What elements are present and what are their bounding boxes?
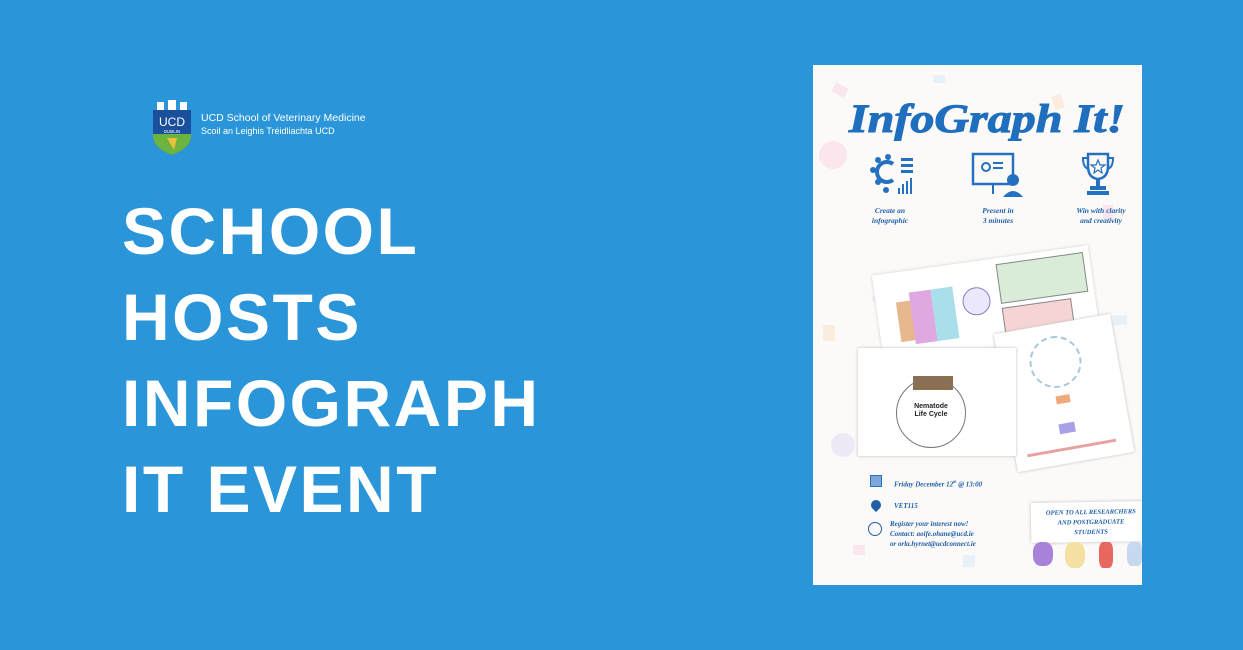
logo bbox=[153, 100, 366, 155]
icon: trophy bbox=[1082, 152, 1114, 195]
caption: win bbox=[1076, 206, 1126, 225]
callout: open to all: STUDENTS bbox=[1074, 529, 1108, 536]
caption: create: Create an bbox=[875, 206, 905, 215]
poster bbox=[813, 65, 1142, 585]
register: or orla.hyrnet@ucdconnect.ie bbox=[890, 540, 976, 548]
headline: HOSTS bbox=[122, 280, 362, 354]
characters bbox=[1033, 542, 1142, 568]
sample: nematode life cycle card bbox=[858, 348, 1016, 456]
icon: calendar bbox=[870, 475, 882, 487]
logo text: Scoil an Leighis Tréidliachta UCD bbox=[201, 126, 335, 136]
register: Contact: aoife.ohane@ucd.ie bbox=[890, 530, 974, 538]
icon: UCD crest: UCD bbox=[159, 115, 185, 129]
sample: right diagram card bbox=[994, 314, 1134, 472]
callout: open to all bbox=[1031, 501, 1151, 543]
callout: open to all: AND POSTGRADUATE bbox=[1058, 518, 1124, 527]
confetti background bbox=[819, 75, 1127, 567]
poster title: InfoGraph It! bbox=[849, 96, 1125, 141]
icon: email bbox=[868, 522, 882, 536]
logo text: UCD School of Veterinary Medicine bbox=[201, 112, 366, 124]
headline: SCHOOL bbox=[122, 194, 419, 268]
logo text bbox=[201, 112, 366, 136]
caption: create: infographic bbox=[872, 216, 908, 225]
icon: presentation bbox=[972, 152, 1023, 197]
caption: win: Win with clarity bbox=[1076, 206, 1126, 215]
event details bbox=[868, 475, 982, 548]
sample: cartilage sheet bbox=[872, 245, 1100, 363]
sample: nematode life cycle card: Nematode bbox=[914, 403, 948, 410]
callout: open to all: OPEN TO ALL RESEARCHERS bbox=[1046, 508, 1136, 517]
register: Register your interest now! bbox=[890, 520, 968, 528]
date: Friday December 12th @ 13:00 bbox=[894, 479, 982, 488]
icon: pin bbox=[869, 498, 883, 512]
sample: nematode life cycle card: Life Cycle bbox=[914, 411, 948, 418]
caption: present: Present in bbox=[982, 206, 1014, 215]
headline: INFOGRAPH bbox=[122, 366, 540, 440]
headline: IT EVENT bbox=[122, 452, 439, 526]
headline bbox=[122, 194, 540, 526]
caption: present bbox=[982, 206, 1014, 225]
caption: present: 3 minutes bbox=[983, 216, 1013, 225]
caption: create bbox=[872, 206, 908, 225]
caption: win: and creativity bbox=[1080, 216, 1122, 225]
icon: UCD crest: DUBLIN bbox=[164, 129, 180, 134]
icon: create infographic bbox=[870, 154, 913, 194]
register bbox=[890, 520, 976, 548]
icon: UCD crest bbox=[153, 100, 191, 155]
location: VET115 bbox=[894, 502, 918, 510]
